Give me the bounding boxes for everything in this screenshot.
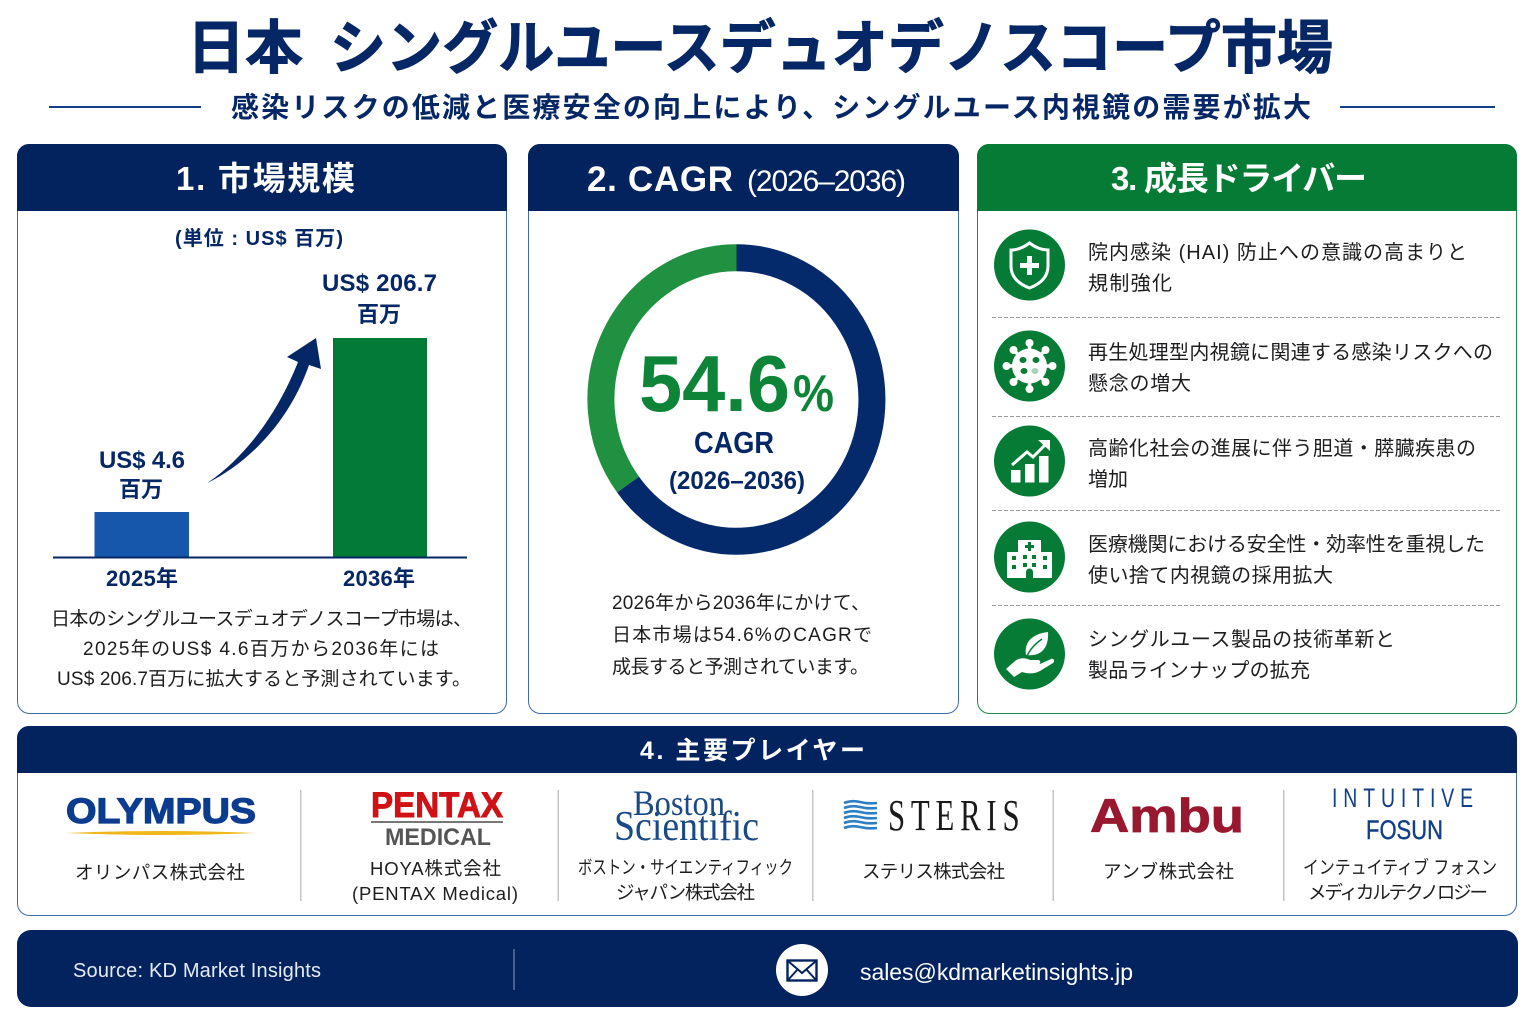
header: key players [17, 726, 1517, 773]
icon: growth chart [994, 426, 1065, 496]
driver 1 text: 規制強化 [1088, 272, 1172, 295]
header: market size [17, 144, 507, 211]
logo: Pentax Medical: MEDICAL [385, 824, 491, 851]
panel: key players [17, 726, 1517, 916]
market size description: 日本のシングルユースデュオデノスコープ市場は、 [51, 608, 472, 630]
logo: Boston Scientific: Scientific [614, 804, 759, 850]
unit label: (単位 : US$ 百万) [175, 227, 343, 250]
driver 2 text [1088, 341, 1493, 395]
header: CAGR: (2026–2036) [747, 165, 906, 198]
driver 2 text: 再生処理型内視鏡に関連する感染リスクへの [1088, 341, 1493, 364]
caption: Intuitive Fosun: インテュイティブ フォスン [1303, 857, 1497, 878]
driver 5 text [1088, 628, 1395, 682]
caption: Boston Scientific: ジャパン株式会社 [616, 882, 755, 903]
market size description: US$ 206.7百万に拡大すると予測されています。 [57, 668, 471, 690]
market size description [51, 608, 472, 690]
driver 4 text: 使い捨て内視鏡の採用拡大 [1088, 564, 1333, 587]
logo: Intuitive Fosun: FOSUN [1366, 815, 1443, 845]
market size description: 2025年のUS$ 4.6百万から2036年には [83, 638, 439, 660]
icon: shield [994, 230, 1065, 300]
icon: hospital [994, 522, 1065, 592]
caption: Steris: ステリス株式会社 [862, 861, 1005, 882]
bar chart: US$ 206.7 [322, 270, 437, 297]
driver 5 text: シングルユース製品の技術革新と [1088, 628, 1395, 651]
driver 1 text: 院内感染 (HAI) 防止への意識の高まりと [1088, 241, 1467, 264]
logo: Boston Scientific [614, 783, 759, 850]
CAGR description: 成長すると予測されています。 [612, 656, 869, 678]
logo: Boston Scientific: Boston [633, 783, 725, 823]
icon: virus [994, 330, 1065, 402]
caption: Boston Scientific [578, 857, 793, 903]
bar chart: US$ 4.6 [99, 447, 185, 474]
subtitle: 感染リスクの低減と医療安全の向上により、シングルユース内視鏡の需要が拡大 [231, 91, 1311, 123]
header: CAGR: 2. CAGR [587, 160, 733, 199]
panel: growth drivers [977, 144, 1517, 714]
bar chart: 2036年 [343, 566, 415, 591]
driver 2 text: 懸念の増大 [1088, 372, 1191, 395]
logo: Intuitive Fosun [1332, 783, 1473, 845]
caption: HOYA: (PENTAX Medical) [352, 883, 518, 904]
caption: HOYA [352, 858, 518, 904]
footer [17, 930, 1518, 1007]
email: sales@kdmarketinsights.jp [860, 959, 1133, 985]
driver 3 text: 高齢化社会の進展に伴う胆道・膵臓疾患の [1088, 437, 1476, 460]
panel: market size [17, 144, 507, 714]
caption: Boston Scientific: ボストン・サイエンティフィック [578, 857, 793, 878]
title: 日本 [187, 16, 303, 81]
header: growth drivers [977, 144, 1517, 211]
header: CAGR [528, 144, 959, 211]
logo: Intuitive Fosun: INTUITIVE [1332, 783, 1473, 813]
driver 3 text [1088, 437, 1476, 491]
header: market size: 1. 市場規模 [176, 160, 355, 197]
arrow: growth [208, 338, 321, 483]
icon: mail [776, 944, 828, 996]
driver 4 text [1088, 533, 1485, 587]
icon: hand and leaf [994, 618, 1065, 690]
CAGR description: 2026年から2036年にかけて、 [612, 592, 870, 614]
bar chart [53, 270, 467, 591]
CAGR description [612, 592, 872, 678]
caption: Olympus: オリンパス株式会社 [75, 862, 245, 883]
logo: Steris: STERIS [888, 792, 1020, 840]
header: key players: 4. 主要プレイヤー [640, 737, 865, 765]
caption: Ambu: アンブ株式会社 [1103, 861, 1234, 882]
logo: Ambu: Ambu [1090, 789, 1244, 842]
CAGR description: 日本市場は54.6%のCAGRで [612, 624, 872, 646]
driver 5 text: 製品ラインナップの拡充 [1088, 659, 1310, 682]
driver 1 text [1088, 241, 1467, 295]
logo: Pentax Medical: PENTAX [371, 786, 504, 825]
caption: Intuitive Fosun: メディカルテクノロジー [1308, 882, 1488, 903]
header: growth drivers: 3. 成長ドライバー [1111, 160, 1367, 197]
logo: Olympus: OLYMPUS [66, 792, 256, 831]
donut chart: CAGR [694, 425, 774, 460]
donut chart: (2026–2036) [669, 467, 805, 495]
caption: HOYA: HOYA株式会社 [370, 858, 501, 879]
logo: Pentax Medical [371, 786, 504, 851]
driver 4 text: 医療機関における安全性・効率性を重視した [1088, 533, 1485, 556]
caption: Intuitive Fosun [1303, 857, 1497, 903]
source: Source: KD Market Insights [73, 960, 321, 982]
bar chart: 百万 [119, 477, 163, 502]
donut chart: % [793, 365, 834, 423]
donut chart [601, 258, 872, 541]
title: シングルユースデュオデノスコープ市場 [330, 16, 1333, 81]
donut chart: 54.6 [639, 339, 790, 428]
driver 3 text: 増加 [1088, 468, 1128, 491]
panel: CAGR [528, 144, 959, 714]
bar chart: 2025年 [106, 566, 178, 591]
bar chart: 百万 [357, 302, 401, 327]
